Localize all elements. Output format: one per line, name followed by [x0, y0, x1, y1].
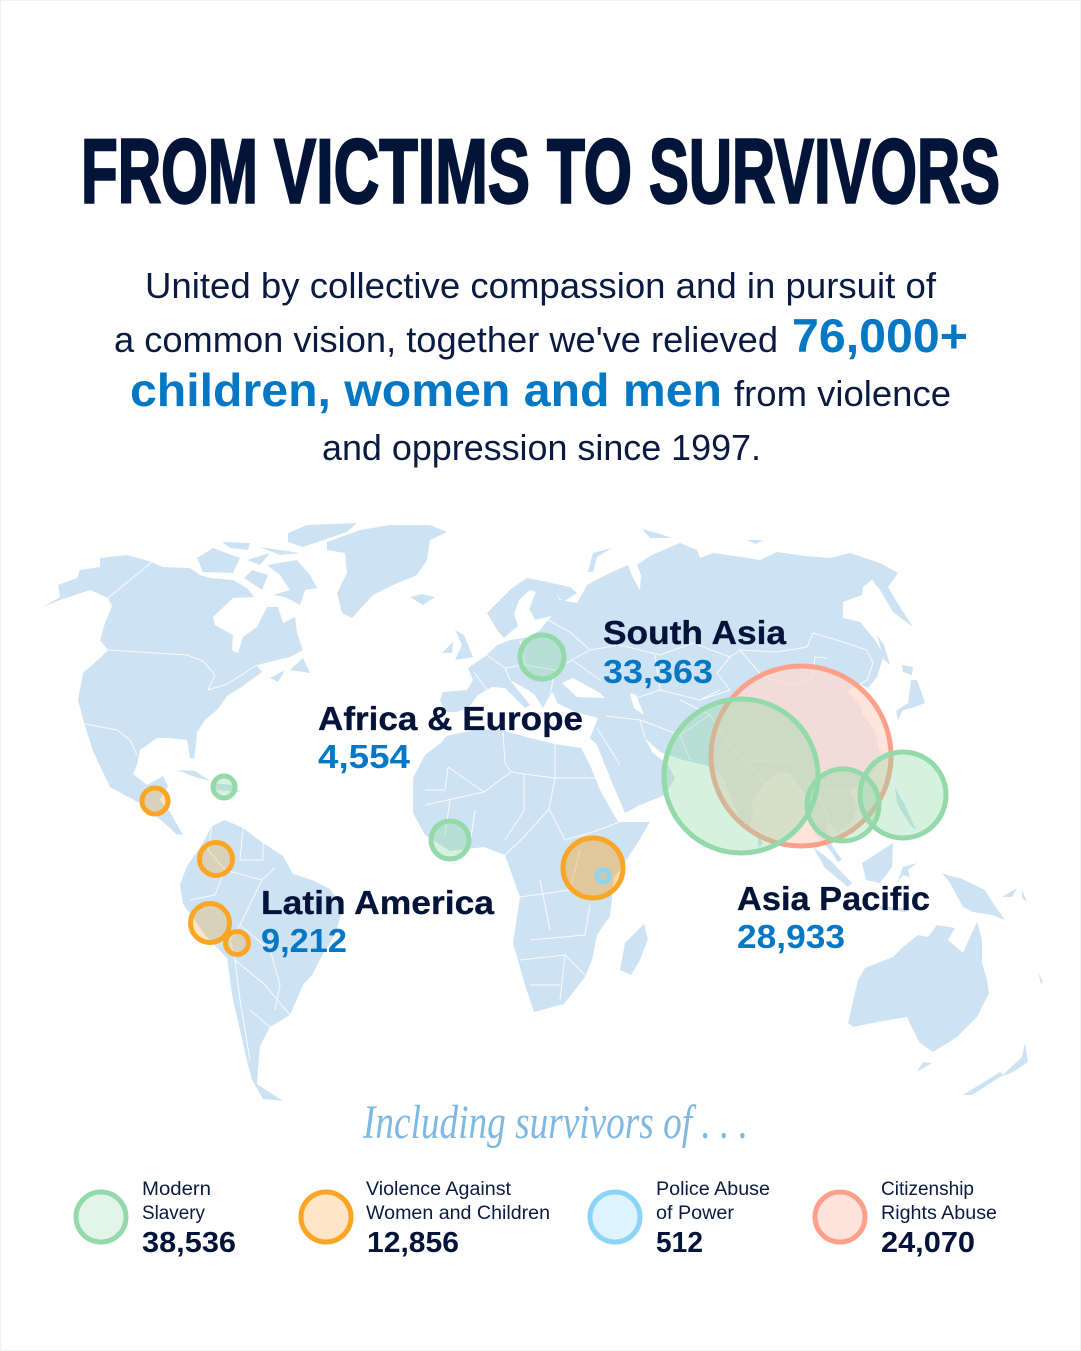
map: Africa [413, 730, 650, 1012]
legend: Violence Against Women and Children: Women and Children [366, 1203, 550, 1224]
map: Madagascar [620, 924, 648, 975]
legend: Police Abuse of Power: of Power [656, 1203, 735, 1224]
title: VICTIMS [274, 122, 530, 222]
legend: Violence Against Women and Children: 12,856 [367, 1227, 459, 1259]
bubble: modern slavery, South-East Asia [807, 769, 879, 841]
bubble: modern slavery, Caribbean [213, 776, 235, 798]
map: Greenland [327, 525, 447, 618]
label: South Asia [603, 614, 787, 690]
label: Latin America [261, 884, 495, 959]
map: South America [180, 820, 343, 1101]
bubble: modern slavery, South Asia [664, 699, 818, 853]
map: North America [43, 555, 303, 835]
map: Sakhalin, Japan, Taiwan and Sri Lanka [758, 635, 925, 848]
title: FROM [81, 122, 258, 222]
map: New Guinea [942, 873, 1027, 920]
map: Iceland [410, 594, 435, 605]
bubbles [142, 635, 946, 954]
legend: Citizenship Rights Abuse: Rights Abuse [881, 1203, 997, 1224]
label: Latin America: 9,212 [261, 922, 347, 959]
label: Asia Pacific [737, 880, 930, 955]
bubble: modern slavery, Eastern Europe [520, 635, 564, 679]
map: seas cut-outs [562, 678, 644, 715]
map: islands of Europe [442, 630, 473, 660]
bubble: citizenship rights, South and East Asia [711, 666, 891, 846]
legend: Modern Slavery: Slavery [142, 1203, 205, 1224]
bubble: violence, Colombia [200, 842, 232, 876]
legend: Police Abuse of Power [590, 1179, 770, 1259]
label: Africa and Europe [318, 700, 583, 775]
legend: Citizenship Rights Abuse: Citizenship [881, 1179, 974, 1200]
legend: Police Abuse of Power: 512 [656, 1227, 703, 1259]
legend: Violence Against Women and Children: Violence Against [366, 1179, 512, 1200]
intro text block: from violence [734, 373, 951, 414]
label: Asia Pacific: 28,933 [737, 918, 845, 955]
script subheading: Including survivors of . . . [362, 1096, 748, 1149]
map: Canadian Arctic islands [197, 523, 357, 682]
intro text block: United by collective compassion and in pursuit of [145, 265, 937, 306]
legend: Police Abuse of Power: Police Abuse [656, 1179, 770, 1200]
bubble: violence, Peru [190, 904, 230, 942]
map: South-East Asia islands [813, 787, 917, 912]
intro text block: children, women and men [130, 364, 722, 416]
legend: Modern Slavery: Modern [142, 1179, 211, 1200]
bubble: violence, Bolivia [226, 932, 248, 954]
map: Eurasia [440, 543, 913, 862]
map: country borders [85, 562, 873, 1060]
world map [43, 523, 1043, 1101]
label: Latin America: Latin America [261, 884, 495, 921]
label: Africa and Europe: 4,554 [318, 738, 411, 775]
map: Tasmania [917, 1062, 932, 1072]
map: Caribbean islands [177, 770, 240, 792]
legend: Violence Against Women and Children [301, 1179, 550, 1259]
label: Asia Pacific: Asia Pacific [737, 880, 930, 917]
bubble: police abuse, East Africa [596, 870, 610, 882]
bubble: violence, Central America [142, 788, 168, 814]
map: arctic Russia islands [588, 529, 763, 572]
bubble: modern slavery, Philippines [860, 752, 946, 838]
bubble: modern slavery, West Africa [431, 821, 469, 859]
intro text block: and oppression since 1997. [322, 427, 761, 468]
legend: Modern Slavery [76, 1179, 236, 1259]
legend: Citizenship Rights Abuse [815, 1179, 997, 1259]
label: Africa and Europe: Africa & Europe [318, 700, 583, 737]
label: South Asia: South Asia [603, 614, 787, 651]
intro text block: a common vision, together we've relieved [114, 319, 778, 360]
title [81, 122, 1000, 222]
title: TO [547, 122, 632, 222]
map: New Zealand [963, 972, 1043, 1095]
intro text block: 76,000+ [792, 309, 968, 362]
legend: Modern Slavery: 38,536 [142, 1227, 236, 1259]
intro text block [114, 265, 968, 468]
legend: Citizenship Rights Abuse: 24,070 [881, 1227, 975, 1259]
map: Australia [848, 922, 989, 1052]
bubble: violence, East Africa [563, 838, 623, 898]
label: South Asia: 33,363 [603, 653, 713, 690]
